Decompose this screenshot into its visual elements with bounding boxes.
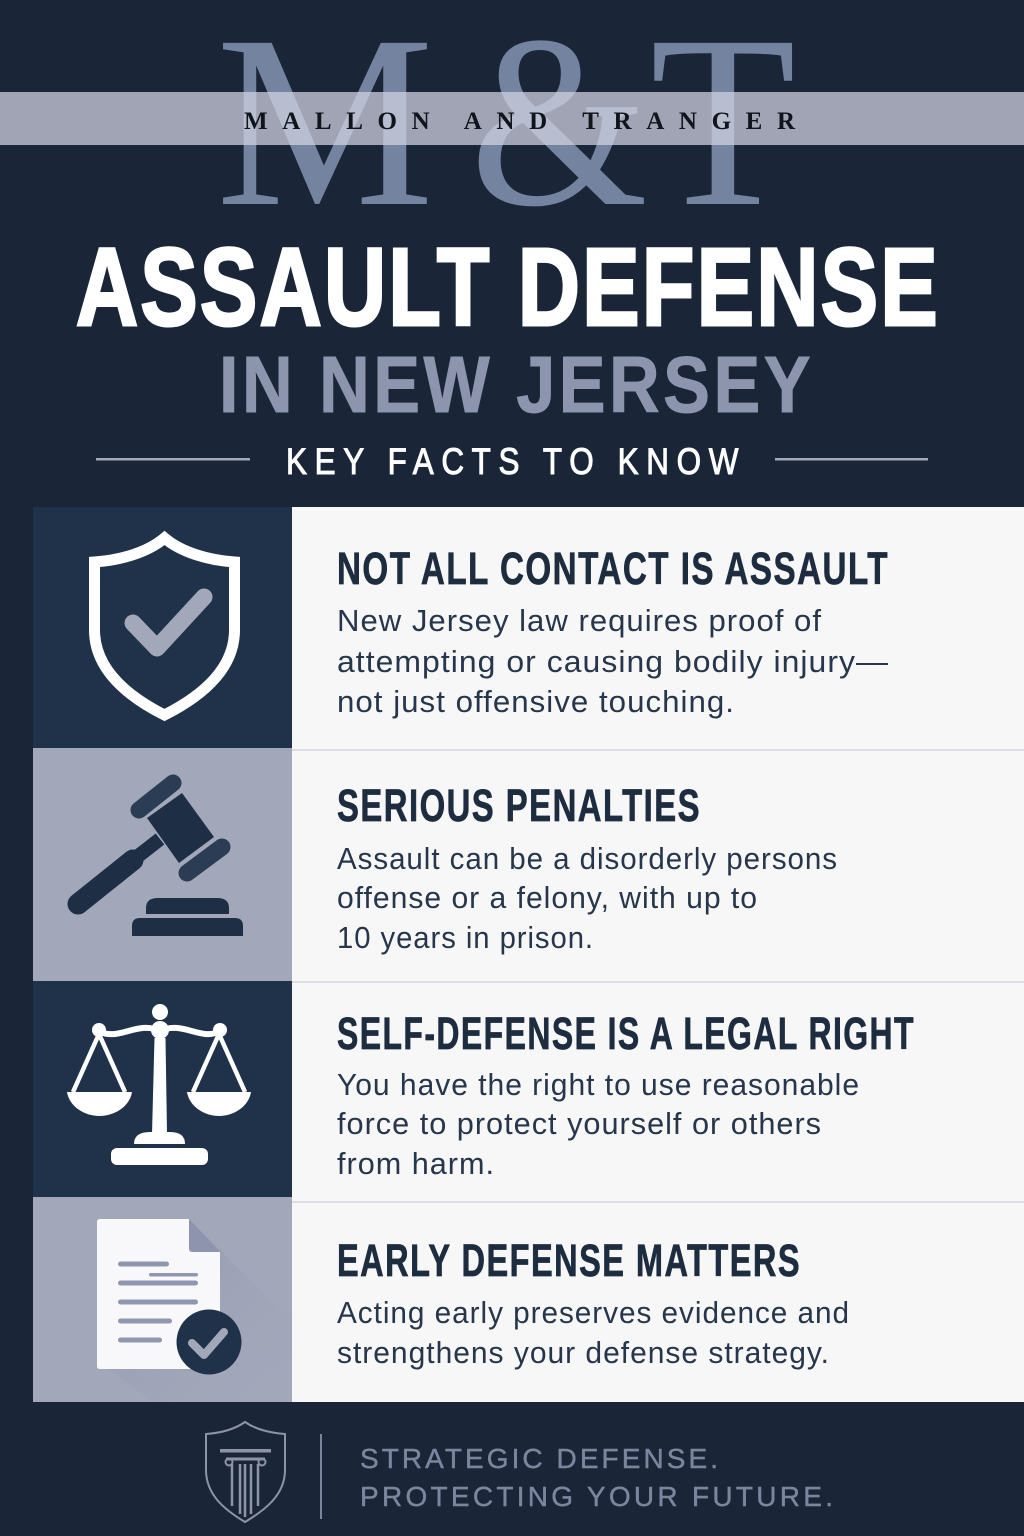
body text: offense or a felony, with up to	[337, 880, 758, 915]
icon: gavel	[78, 783, 243, 936]
body text	[337, 603, 889, 719]
footer divider	[320, 1434, 322, 1519]
footer logo: shield with column	[206, 1422, 285, 1522]
heading: SERIOUS PENALTIES	[337, 780, 701, 831]
subtitle: IN NEW JERSEY	[219, 340, 814, 429]
body text	[337, 1295, 850, 1370]
panel: early defense matters	[33, 1197, 1024, 1402]
row dividers	[292, 749, 1024, 1203]
panel: not all contact is assault	[33, 507, 1024, 750]
body text: Assault can be a disorderly persons	[337, 841, 838, 876]
body text	[337, 841, 838, 955]
icon: scales of justice	[67, 1004, 251, 1165]
body text: strengthens your defense strategy.	[337, 1335, 830, 1370]
monogram: M&T	[216, 0, 796, 258]
footer tagline	[360, 1443, 833, 1512]
body text: not just offensive touching.	[337, 684, 735, 719]
body text: force to protect yourself or others	[337, 1106, 822, 1141]
firm name band: MALLON AND TRANGER	[244, 108, 796, 135]
icon: document with check	[97, 1219, 292, 1402]
body text: from harm.	[337, 1146, 495, 1181]
body text	[337, 1067, 860, 1181]
icon: shield with check	[94, 538, 234, 715]
body text: New Jersey law requires proof of	[337, 603, 822, 638]
body text: Acting early preserves evidence and	[337, 1295, 850, 1330]
tagline with rules: KEY FACTS TO KNOW	[286, 441, 746, 482]
body text: attempting or causing bodily injury—	[337, 644, 889, 679]
panel: self-defense is a legal right	[33, 981, 1024, 1202]
firm name band	[0, 92, 1024, 145]
footer tagline: PROTECTING YOUR FUTURE.	[360, 1481, 833, 1512]
body text: You have the right to use reasonable	[337, 1067, 860, 1102]
panel: serious penalties	[33, 748, 1024, 982]
footer tagline: STRATEGIC DEFENSE.	[360, 1443, 718, 1474]
heading: EARLY DEFENSE MATTERS	[337, 1235, 801, 1286]
body text: 10 years in prison.	[337, 920, 594, 955]
